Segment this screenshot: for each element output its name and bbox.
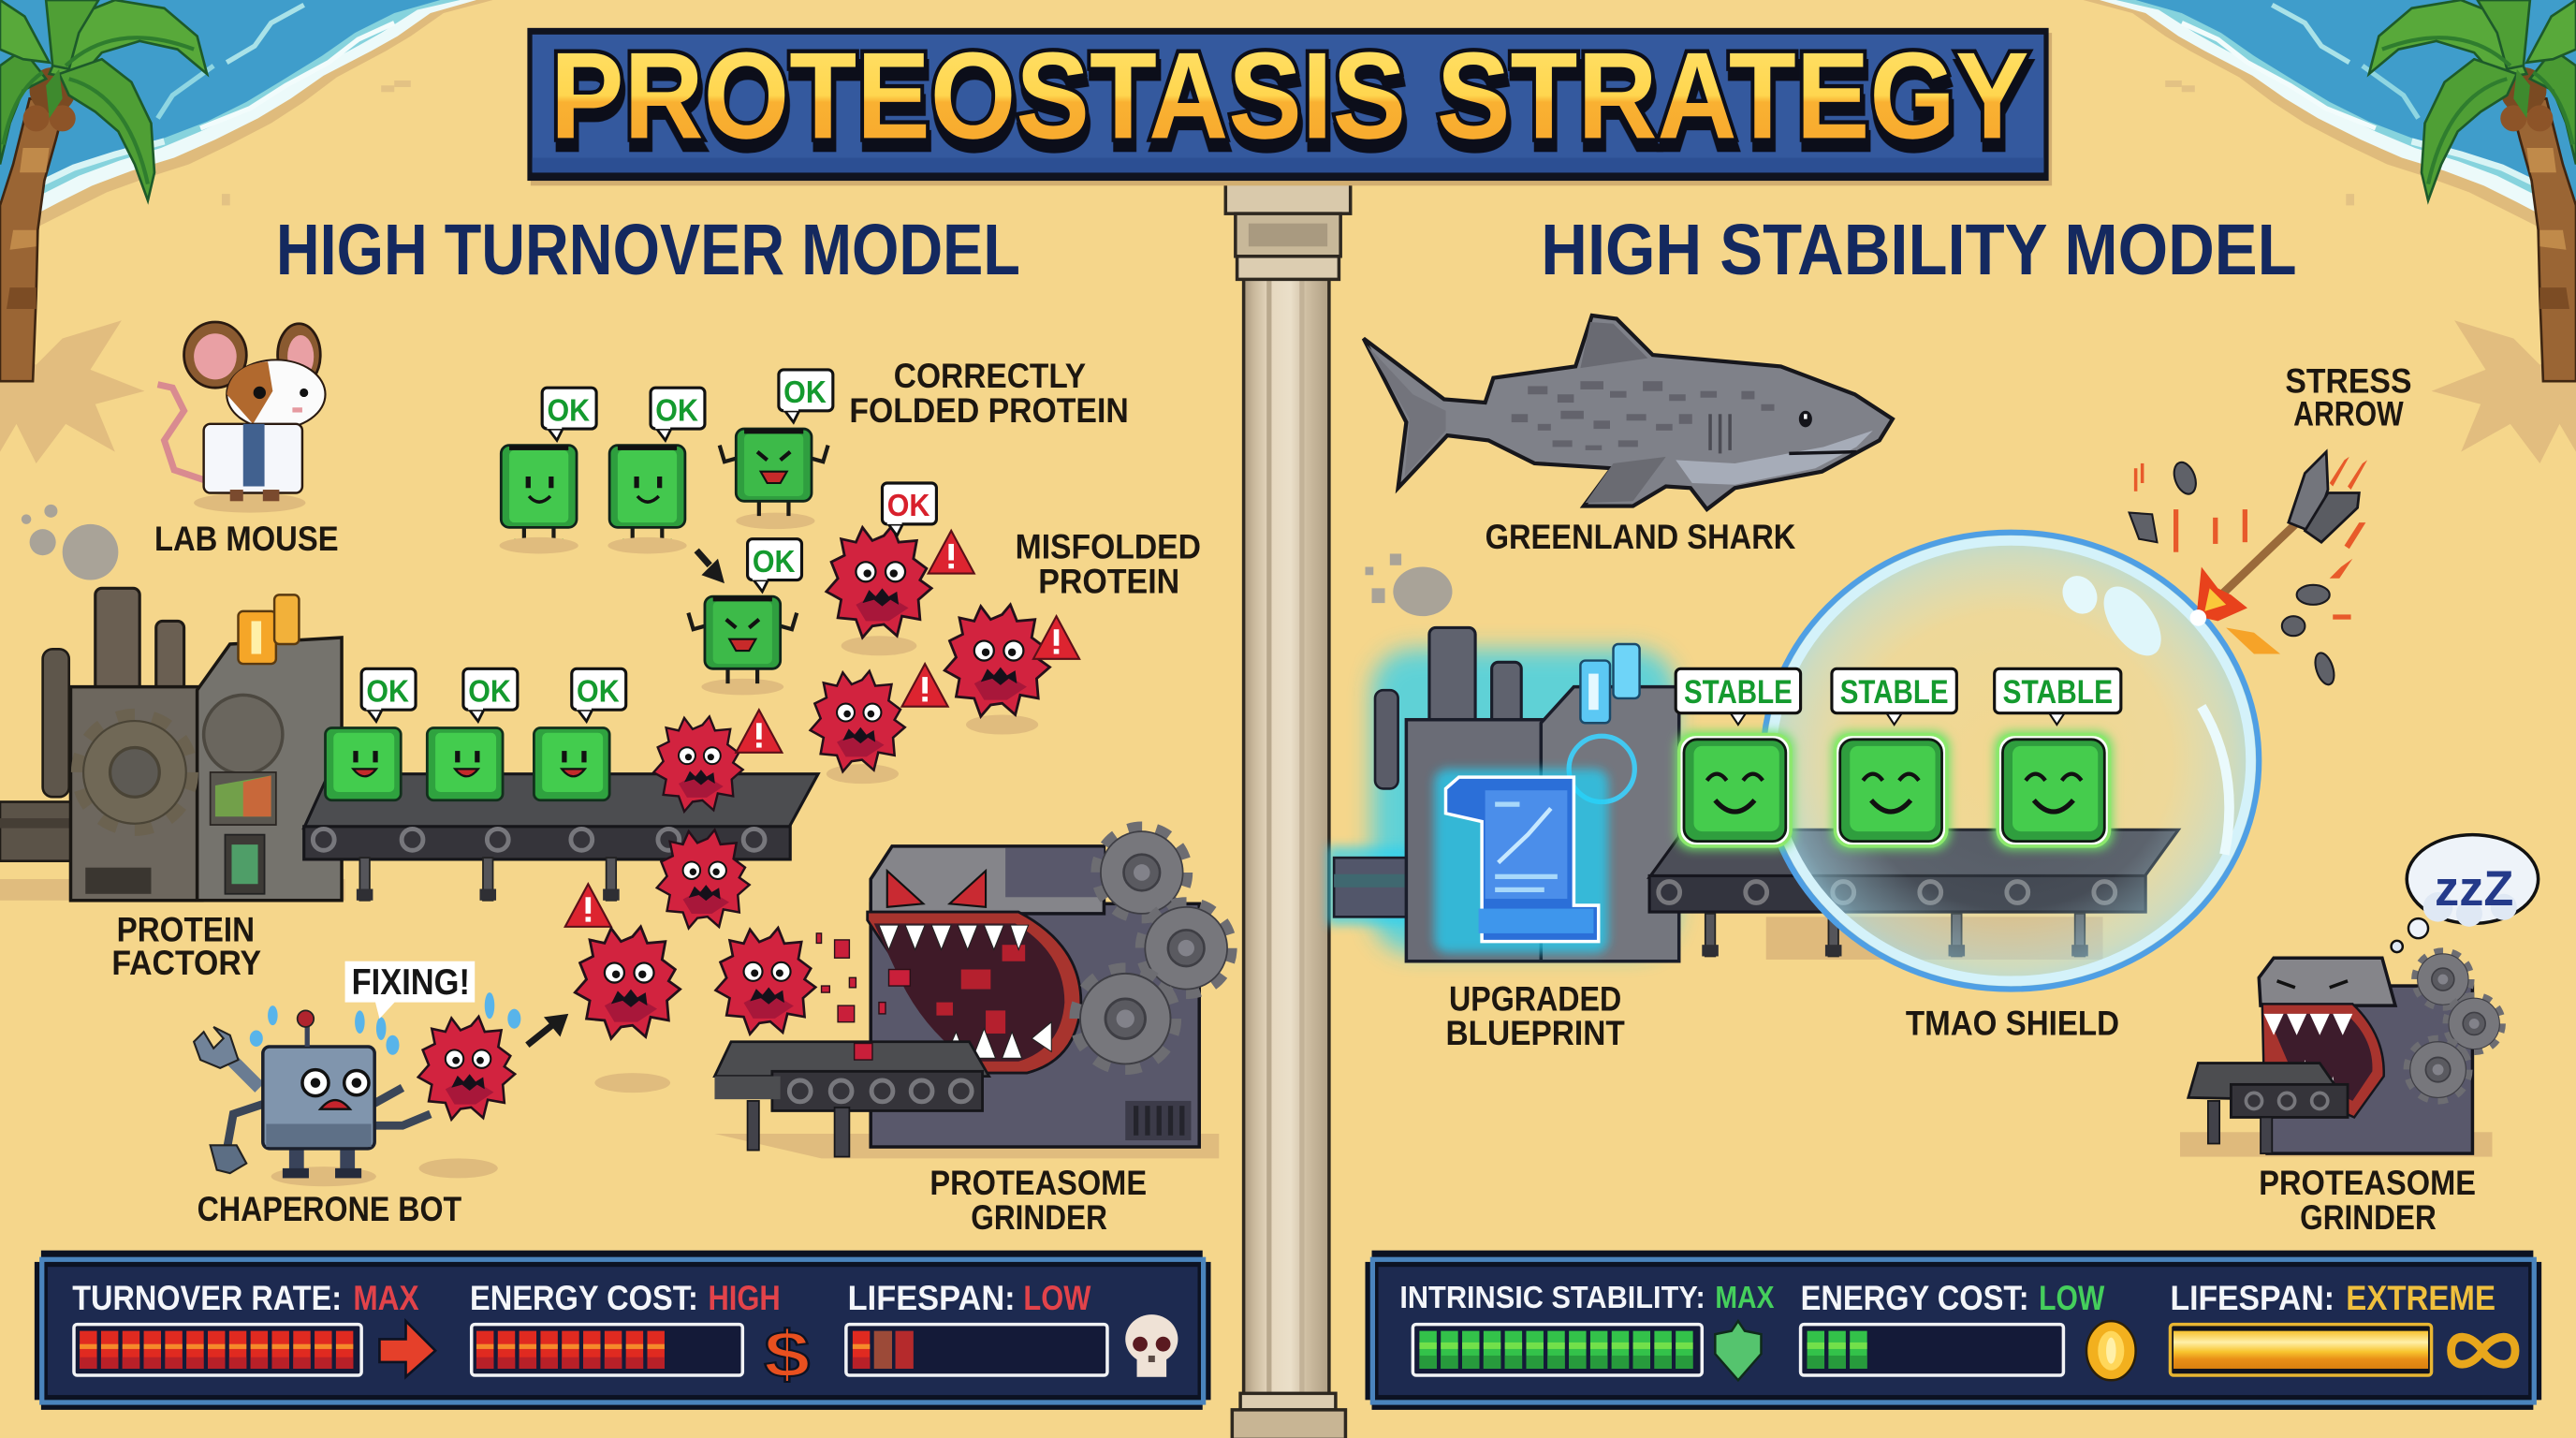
ok bubble 1: OK	[547, 393, 590, 428]
misfolded dropping	[657, 829, 750, 928]
stress arrow	[2130, 452, 2367, 687]
icon: palm tree right	[2369, 0, 2576, 381]
fixing speech bubble	[345, 961, 475, 1019]
label: proteasome grinder right: PROTEASOME	[2259, 1164, 2476, 1202]
ok bubble 3	[779, 370, 833, 422]
stable bubble 1	[1676, 668, 1801, 725]
icon: dollar sign: $	[764, 1317, 810, 1391]
label: protein factory: PROTEIN	[117, 911, 255, 949]
stat: energy cost high: HIGH	[708, 1279, 781, 1317]
smoke left	[22, 505, 118, 580]
stat: lifespan low: LOW	[1023, 1279, 1091, 1317]
icon: gold coin	[2086, 1321, 2136, 1380]
warning sign 3	[902, 664, 948, 707]
icon: skull	[1125, 1314, 1178, 1377]
warning sign 1	[929, 531, 974, 574]
stat: energy cost low: ENERGY COST:	[1801, 1279, 2029, 1317]
label: misfolded protein	[1016, 528, 1201, 601]
icon: green shield	[1715, 1321, 1761, 1380]
beach corner: left ocean	[0, 0, 493, 246]
ok bubble 1	[542, 388, 596, 440]
label: stress arrow: ARROW	[2293, 395, 2404, 433]
impact flash	[2190, 567, 2280, 654]
fixing speech bubble: FIXING!	[352, 962, 470, 1003]
label: proteasome grinder left: GRINDER	[971, 1198, 1107, 1237]
stat: turnover rate	[72, 1279, 419, 1375]
ok bubble belt 2: OK	[468, 674, 511, 709]
stat: lifespan low: LIFESPAN:	[848, 1279, 1016, 1317]
ok bubble 3: OK	[783, 375, 827, 410]
title text: PROTEOSTASIS STRATEGY	[550, 26, 2029, 164]
label: chaperone bot: CHAPERONE BOT	[198, 1190, 462, 1228]
correctly folded protein 2	[609, 446, 685, 544]
tmao shield bubble	[1763, 533, 2259, 990]
stat: intrinsic stability: MAX	[1715, 1281, 1775, 1315]
red ok bubble: OK	[887, 489, 929, 523]
icon: palm tree left	[0, 0, 207, 381]
panel: right stats	[1365, 1251, 2541, 1410]
label: correctly folded protein: FOLDED PROTEIN	[849, 391, 1129, 430]
stat: energy cost high	[470, 1279, 781, 1375]
correctly folded protein 3	[720, 429, 828, 516]
icon: lab mouse	[157, 322, 326, 513]
icon: infinity	[2452, 1337, 2515, 1364]
warning sign belt	[736, 710, 782, 753]
label: lab mouse: LAB MOUSE	[154, 520, 339, 558]
label: stress arrow	[2285, 361, 2411, 433]
stat: energy cost low	[1801, 1279, 2104, 1375]
ok bubble 2	[651, 388, 705, 440]
correctly folded protein 4	[688, 596, 797, 683]
warning sign 2	[1033, 616, 1079, 659]
label: upgraded blueprint	[1445, 979, 1625, 1052]
shadow ellipses	[500, 513, 815, 695]
grinder belt	[2188, 1064, 2348, 1153]
orange crystals	[238, 594, 299, 664]
arrow: repaired	[527, 1014, 568, 1045]
ok bubble belt 3	[572, 668, 626, 721]
shark	[1364, 315, 1893, 509]
label: proteasome grinder right	[2259, 1164, 2476, 1237]
grinder gears	[2408, 952, 2502, 1100]
misfolded on belt	[653, 716, 743, 812]
stable bubble 1: STABLE	[1684, 674, 1793, 711]
label: proteasome grinder left	[929, 1164, 1147, 1237]
protein factory upgraded	[1327, 627, 1679, 961]
misfolded held	[418, 1017, 515, 1120]
title banner	[527, 26, 2052, 185]
label: correctly folded protein: CORRECTLY	[894, 357, 1086, 395]
ok bubble 4	[748, 539, 801, 592]
palm shadow right	[2432, 320, 2576, 463]
ok bubble belt 1	[361, 668, 416, 721]
stable bubble 2	[1832, 668, 1956, 725]
red ok bubble	[882, 483, 936, 536]
blue crystals	[1580, 644, 1640, 723]
heading: high turnover model: HIGH TURNOVER MODEL	[276, 210, 1020, 290]
stat: turnover rate: TURNOVER RATE:	[72, 1279, 342, 1317]
input belt	[714, 1042, 989, 1157]
sweat drops	[250, 992, 520, 1055]
conveyor belt left	[304, 774, 818, 901]
ok bubble belt 3: OK	[577, 674, 620, 709]
stat: lifespan extreme	[2170, 1279, 2496, 1375]
stable bubble 3: STABLE	[2002, 674, 2113, 711]
beach corner: right ocean	[2083, 0, 2576, 246]
label: protein factory: FACTORY	[111, 944, 261, 982]
stat: lifespan low	[846, 1279, 1107, 1375]
thought bubble with zzz	[2392, 835, 2539, 952]
misfolded proteins upper	[811, 483, 1079, 784]
label: protein factory	[111, 911, 261, 982]
thought bubble with zzz: zzZ	[2435, 861, 2513, 917]
label: upgraded blueprint: BLUEPRINT	[1445, 1014, 1625, 1052]
proteasome grinder right (sleeping)	[2180, 952, 2502, 1157]
gears	[1076, 829, 1231, 1067]
stat: lifespan extreme: LIFESPAN:	[2170, 1279, 2334, 1317]
label: stress arrow: STRESS	[2285, 361, 2411, 400]
correctly folded protein 1	[501, 446, 577, 544]
stat: energy cost high: ENERGY COST:	[470, 1279, 698, 1317]
label: tmao shield: TMAO SHIELD	[1906, 1005, 2119, 1043]
heading: high stability model: HIGH STABILITY MODEL	[1541, 210, 2297, 290]
misfolded protein 1	[827, 526, 931, 638]
ok bubble belt 1: OK	[366, 674, 409, 709]
protein factory	[0, 588, 345, 901]
arrow: into misfold	[696, 550, 724, 583]
misfolded falling pair	[575, 927, 815, 1093]
conveyor belt right	[1649, 829, 2178, 960]
sparks	[2134, 457, 2367, 620]
misfolded protein 3	[811, 671, 905, 771]
label: correctly folded protein	[849, 357, 1129, 430]
stable proteins	[1676, 668, 2121, 849]
stat: energy cost low: LOW	[2039, 1279, 2104, 1317]
ok bubble belt 2	[463, 668, 518, 721]
panel: left stats	[35, 1251, 1211, 1410]
label: greenland shark: GREENLAND SHARK	[1486, 518, 1796, 556]
stable bubble 3	[1995, 668, 2121, 725]
proteasome grinder left	[714, 829, 1231, 1158]
debris	[816, 933, 910, 1060]
label: proteasome grinder right: GRINDER	[2300, 1198, 2437, 1237]
palm shadow left	[0, 320, 144, 463]
stat: turnover rate: MAX	[353, 1279, 419, 1317]
smoke right	[1365, 553, 1453, 616]
label: misfolded protein: MISFOLDED	[1016, 528, 1201, 566]
chaperone bot	[194, 992, 520, 1186]
ok bubble 4: OK	[753, 545, 795, 580]
upgraded blueprint	[1434, 769, 1608, 953]
icon: red arrow	[379, 1321, 435, 1377]
center column	[1225, 181, 1351, 1438]
label: proteasome grinder left: PROTEASOME	[929, 1164, 1147, 1202]
stat: intrinsic stability: INTRINSIC STABILITY:	[1399, 1281, 1705, 1315]
label: misfolded protein: PROTEIN	[1038, 563, 1179, 601]
ok proteins group	[500, 370, 833, 695]
stat: intrinsic stability	[1399, 1281, 1775, 1375]
belt proteins left	[326, 668, 626, 800]
warning sign drop	[565, 884, 611, 927]
ok bubble 2: OK	[655, 393, 698, 428]
label: upgraded blueprint: UPGRADED	[1449, 979, 1621, 1018]
stat: lifespan extreme: EXTREME	[2346, 1279, 2496, 1317]
misfolded protein 2	[944, 605, 1050, 716]
rock fragments	[2130, 460, 2337, 687]
stable bubble 2: STABLE	[1840, 674, 1949, 711]
